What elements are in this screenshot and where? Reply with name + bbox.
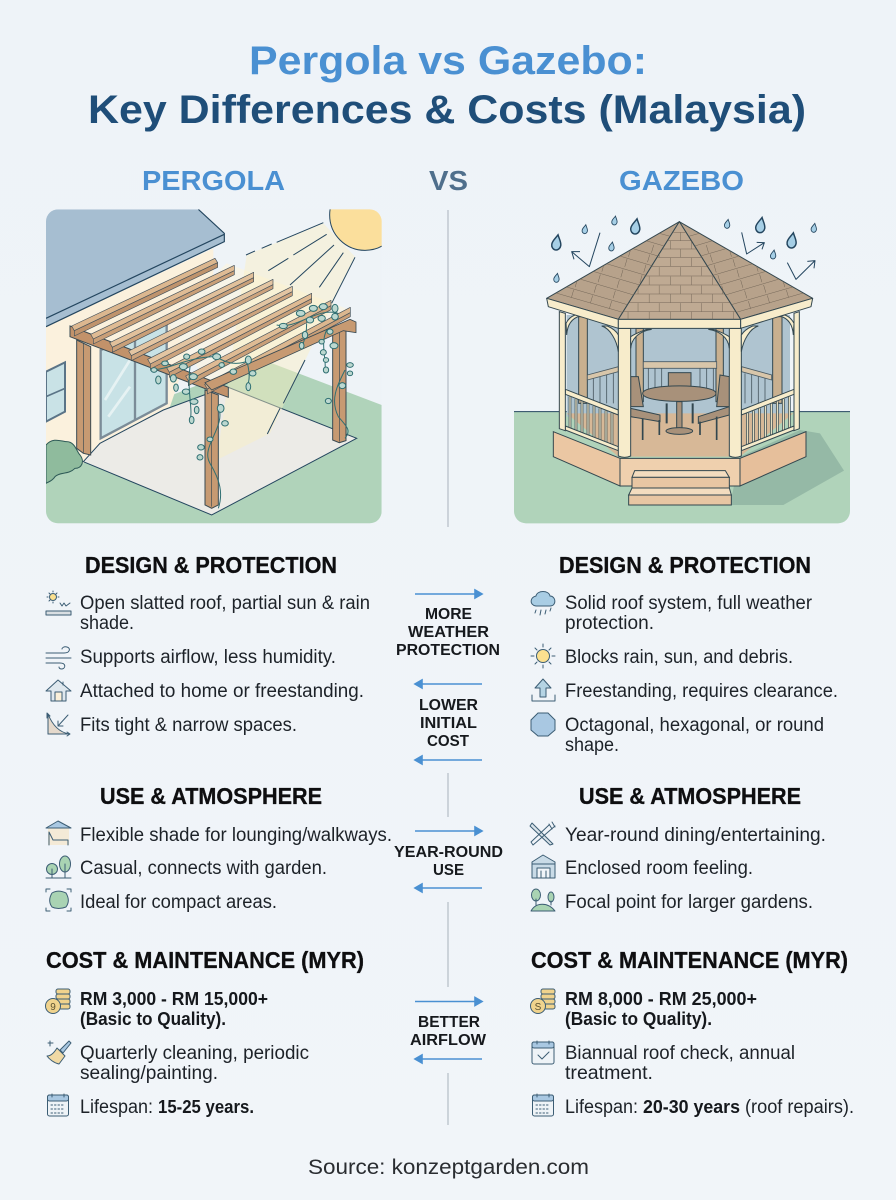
panel: gazebo use and atmosphere	[530, 783, 826, 913]
text: (Basic to Quality).	[80, 1008, 226, 1029]
arrow right	[415, 827, 482, 835]
callout: year-round use: YEAR-ROUND	[394, 844, 503, 861]
text: shade.	[80, 613, 134, 634]
icon: enclosed room	[532, 855, 555, 878]
icon: coins: S	[535, 1002, 542, 1013]
chairs	[631, 373, 729, 440]
icon: calendar	[532, 1094, 554, 1116]
callout: more weather protection: WEATHER	[408, 624, 489, 641]
title: Pergola vs Gazebo:	[249, 39, 647, 83]
sliding door	[101, 323, 167, 438]
roof	[547, 222, 813, 328]
icon: coins	[46, 989, 70, 1014]
text: Blocks rain, sun, and debris.	[565, 647, 793, 668]
callout: year-round use	[394, 827, 503, 892]
panel: pergola use and atmosphere	[46, 783, 392, 913]
text: sealing/painting.	[80, 1063, 218, 1084]
icon: focal point	[531, 889, 555, 911]
text: Casual, connects with garden.	[80, 858, 327, 879]
icon: tight space	[47, 713, 70, 736]
text	[565, 988, 757, 1029]
vines	[150, 304, 353, 508]
heading: pergola: PERGOLA	[142, 165, 285, 196]
roof shingles	[553, 232, 807, 316]
icon: trees	[46, 856, 71, 878]
text: (roof repairs).	[745, 1097, 854, 1118]
text: shape.	[565, 735, 619, 756]
right post	[333, 328, 346, 443]
text: Fits tight & narrow spaces.	[80, 715, 297, 736]
callout: year-round use: USE	[433, 862, 464, 879]
roof	[46, 209, 224, 327]
callout: more weather protection: PROTECTION	[396, 642, 500, 659]
side beam	[205, 319, 356, 390]
icon: compact area	[46, 889, 71, 911]
text	[565, 1043, 795, 1084]
text: treatment.	[565, 1063, 653, 1084]
arrow left	[415, 680, 482, 688]
icon: fork and knife	[530, 822, 555, 845]
deck base	[553, 432, 806, 486]
source: Source: konzeptgarden.com	[308, 1156, 589, 1179]
grass	[46, 360, 382, 523]
icon: octagon	[531, 713, 555, 736]
light behind rafters	[167, 263, 350, 387]
text: Year-round dining/entertaining.	[565, 825, 826, 846]
callout: lower initial cost	[415, 680, 482, 764]
callout: more weather protection: MORE	[425, 606, 472, 623]
left post	[77, 340, 91, 455]
text: 20-30 years	[643, 1096, 740, 1117]
text: Lifespan:	[80, 1097, 153, 1118]
patio	[83, 387, 357, 515]
icon: lounger under shade	[46, 821, 71, 845]
steps	[629, 471, 731, 505]
heading: vs: VS	[429, 165, 468, 196]
text	[80, 1043, 309, 1084]
text	[80, 1096, 254, 1118]
icon: calendar	[48, 1094, 68, 1116]
text: Flexible shade for lounging/walkways.	[80, 825, 392, 846]
text: Attached to home or freestanding.	[80, 681, 364, 702]
heading: COST & MAINTENANCE (MYR)	[46, 947, 364, 973]
text: RM 8,000 - RM 25,000+	[565, 988, 757, 1009]
heading: USE & ATMOSPHERE	[100, 783, 322, 809]
front beam	[70, 326, 228, 397]
front post	[205, 390, 218, 508]
text: (Basic to Quality).	[565, 1008, 712, 1029]
heading: DESIGN & PROTECTION	[85, 552, 337, 578]
icon: house	[46, 680, 71, 701]
arrow right	[415, 590, 482, 598]
shrub	[46, 440, 82, 483]
columns	[559, 312, 799, 457]
sun beam	[217, 223, 355, 460]
text: 15-25 years.	[158, 1096, 254, 1117]
text: Focal point for larger gardens.	[565, 892, 813, 913]
title: Key Differences & Costs (Malaysia)	[88, 88, 806, 132]
text: RM 3,000 - RM 15,000+	[80, 988, 268, 1009]
text: Solid roof system, full weather	[565, 593, 813, 614]
arrow left	[415, 884, 482, 892]
front right rail	[741, 389, 794, 451]
callout: lower initial cost: COST	[427, 733, 469, 750]
text: Octagonal, hexagonal, or round	[565, 715, 824, 736]
callout: more weather protection	[396, 590, 500, 659]
icon: sun over slats	[46, 591, 71, 615]
text: Ideal for compact areas.	[80, 892, 277, 913]
sun	[329, 209, 382, 251]
text: protection.	[565, 613, 654, 634]
heading: DESIGN & PROTECTION	[559, 552, 811, 578]
callout: better airflow: BETTER	[418, 1014, 480, 1031]
raindrops	[551, 216, 817, 283]
icon: wind	[46, 647, 71, 669]
front left rail	[565, 389, 618, 451]
window	[46, 362, 65, 422]
arrow right	[415, 998, 482, 1006]
panel: gazebo cost and maintenance	[530, 947, 854, 1118]
text	[80, 593, 370, 634]
callout: better airflow: AIRFLOW	[410, 1032, 487, 1049]
title	[88, 39, 806, 132]
arrow left	[415, 1055, 482, 1063]
back wall	[567, 315, 790, 417]
icon: sun	[531, 644, 555, 668]
text: Biannual roof check, annual	[565, 1043, 795, 1064]
panel: pergola design and protection	[46, 552, 370, 736]
icon: coins	[530, 989, 555, 1014]
back columns	[579, 317, 782, 403]
icon: rain cloud	[531, 592, 555, 615]
icon: calendar check	[532, 1041, 554, 1064]
panel: gazebo design and protection	[531, 552, 838, 756]
sun rays	[246, 223, 355, 434]
deflection arrows	[572, 232, 815, 279]
text: Quarterly cleaning, periodic	[80, 1043, 309, 1064]
icon: upward arrow	[532, 679, 555, 701]
panel: gazebo illustration	[514, 216, 850, 525]
rafters	[72, 258, 350, 394]
text	[80, 988, 268, 1029]
panel: pergola cost and maintenance	[46, 947, 364, 1118]
heading: gazebo: GAZEBO	[619, 165, 744, 196]
callout: better airflow	[410, 998, 487, 1063]
heading: COST & MAINTENANCE (MYR)	[531, 947, 848, 973]
callout: lower initial cost: INITIAL	[420, 715, 477, 732]
gazebo shadow	[730, 430, 844, 505]
icon: brush	[47, 1041, 71, 1064]
house wall	[46, 248, 213, 463]
text: Freestanding, requires clearance.	[565, 681, 838, 702]
icon: coins: 9	[50, 1002, 56, 1013]
callout: lower initial cost: LOWER	[419, 697, 478, 714]
panel: pergola illustration	[46, 209, 382, 524]
lawn	[514, 412, 850, 525]
text: Supports airflow, less humidity.	[80, 647, 336, 668]
text: Open slatted roof, partial sun & rain	[80, 593, 370, 614]
heading: USE & ATMOSPHERE	[579, 783, 801, 809]
table	[643, 386, 716, 434]
text: Lifespan:	[565, 1097, 638, 1118]
back rail	[587, 362, 772, 403]
text	[565, 715, 824, 756]
text: Enclosed room feeling.	[565, 858, 753, 879]
text	[565, 593, 813, 634]
arrow left	[415, 756, 482, 764]
text	[565, 1096, 854, 1118]
